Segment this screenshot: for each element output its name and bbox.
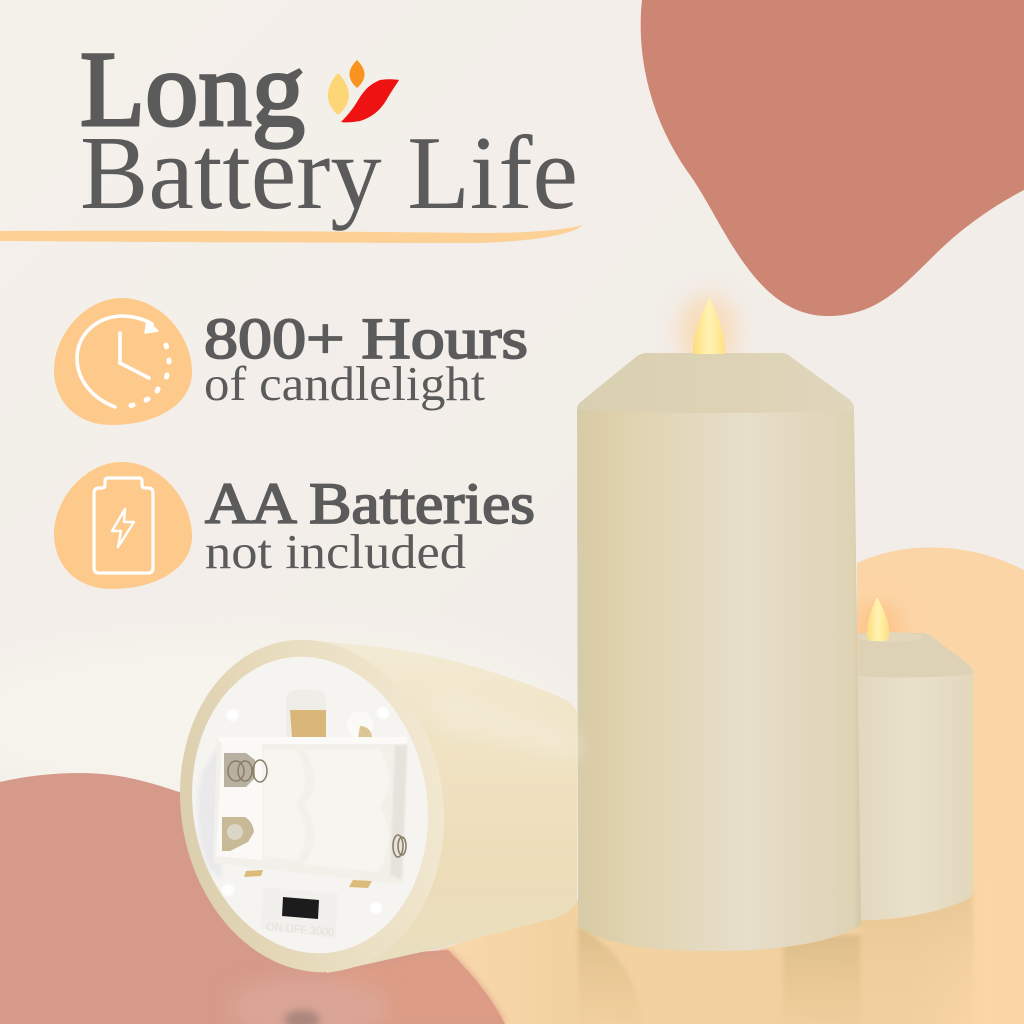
white end plate xyxy=(171,640,449,970)
flame glow xyxy=(854,602,902,654)
light post xyxy=(347,711,373,739)
subheading: of candlelight: of candlelight xyxy=(204,356,485,411)
battery bay left xyxy=(264,750,305,860)
battery bay right xyxy=(304,750,389,872)
top opening xyxy=(857,632,923,642)
heading: 800+ Hours: 800+ Hours xyxy=(204,306,528,371)
spring contact top xyxy=(224,753,267,787)
chamfered top xyxy=(577,353,854,413)
switch toggle xyxy=(282,897,319,919)
icon blob: battery xyxy=(54,462,192,589)
right wall shade xyxy=(390,745,407,880)
blob: bottom floor tint xyxy=(440,880,990,1024)
floor reflections xyxy=(578,892,973,1024)
outer rim xyxy=(156,621,468,991)
top wall highlight xyxy=(217,737,408,744)
icon: battery with bolt xyxy=(94,478,153,573)
title underline brush stroke xyxy=(0,225,583,243)
small candle xyxy=(854,597,973,920)
candle body xyxy=(577,353,861,951)
body highlight xyxy=(430,690,577,760)
feature: AA batteries xyxy=(54,462,535,589)
flame xyxy=(867,597,889,641)
flat contact bottom xyxy=(222,817,254,851)
switch slot xyxy=(286,690,326,737)
plate shadow left xyxy=(198,740,222,880)
gold tabs xyxy=(244,870,372,888)
peg dots xyxy=(222,707,389,914)
feature: 800+ hours xyxy=(54,298,528,425)
icon: brand flame leaves xyxy=(328,60,399,122)
candle body xyxy=(300,640,577,973)
battery compartment xyxy=(213,737,408,885)
subheading: not included: not included xyxy=(205,524,466,579)
icon blob: clock xyxy=(54,298,192,425)
top shoulder xyxy=(858,633,973,678)
switch label: ON OFF 3000 xyxy=(266,921,335,939)
left contact shelf xyxy=(216,744,262,860)
flame glow xyxy=(678,294,738,370)
flame xyxy=(693,297,725,354)
title line: Long: Long xyxy=(80,31,305,149)
icon: clock with arrow xyxy=(77,316,169,407)
title line: Battery Life: Battery Life xyxy=(80,114,578,231)
blob: top right terracotta xyxy=(641,0,1024,316)
heading: AA Batteries: AA Batteries xyxy=(205,471,535,536)
tall candle xyxy=(577,294,861,951)
blob: right peach xyxy=(560,548,1024,1024)
title xyxy=(80,31,578,231)
candle body xyxy=(858,633,973,920)
salmon reflection under lying candle xyxy=(230,950,505,1024)
lying candle with battery compartment xyxy=(156,621,577,991)
right spring xyxy=(393,835,406,857)
gold window xyxy=(290,710,326,737)
switch plate xyxy=(260,887,338,939)
blob: bottom left terracotta xyxy=(0,773,505,1024)
